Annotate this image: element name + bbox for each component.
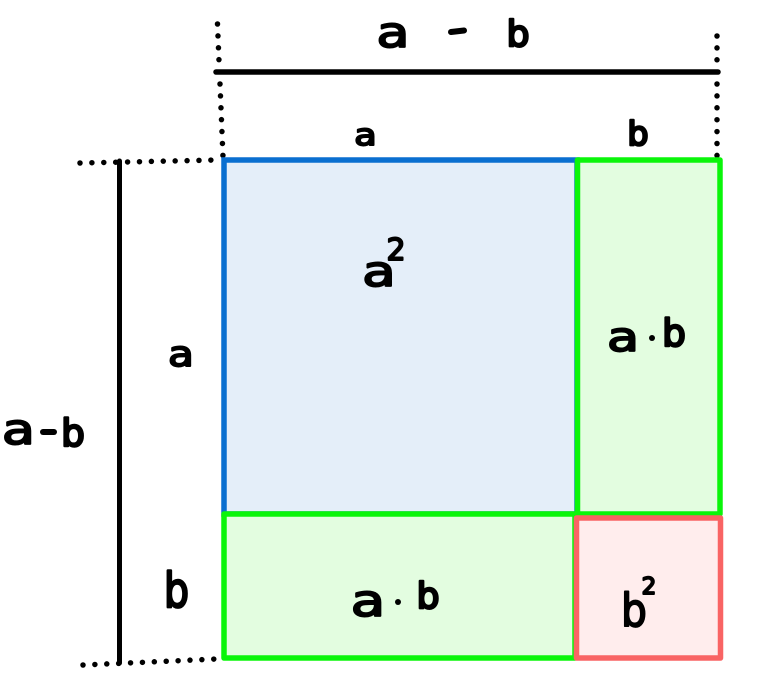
label: top b: b [628,114,648,153]
left dimension: a - b: b [61,412,85,455]
left dimension: a - b: a [2,406,35,454]
panel: top right a·b: b [662,312,686,355]
top dimension: a - b [216,9,718,157]
label: top a: a [354,118,377,152]
left dimension: a - b [2,160,216,665]
panel: bottom left a·b: a [351,575,385,626]
panel: b squared: 2 [642,574,656,600]
panel: bottom left a·b: b [417,576,439,617]
top dimension: a - b: b [507,14,529,55]
panel: top right a·b: a [607,314,639,360]
panel: a squared: 2 [386,233,406,268]
panel: b squared [576,518,720,658]
panel: b squared: b [621,585,647,638]
panel: bottom left a·b [224,514,575,658]
label: side b: b [164,563,189,619]
panel: top right a·b [578,160,720,514]
label: side a: a [168,334,194,375]
top dimension: a - b: a [377,9,409,57]
panel: a squared: a [362,248,396,296]
panel: a squared [224,160,577,514]
